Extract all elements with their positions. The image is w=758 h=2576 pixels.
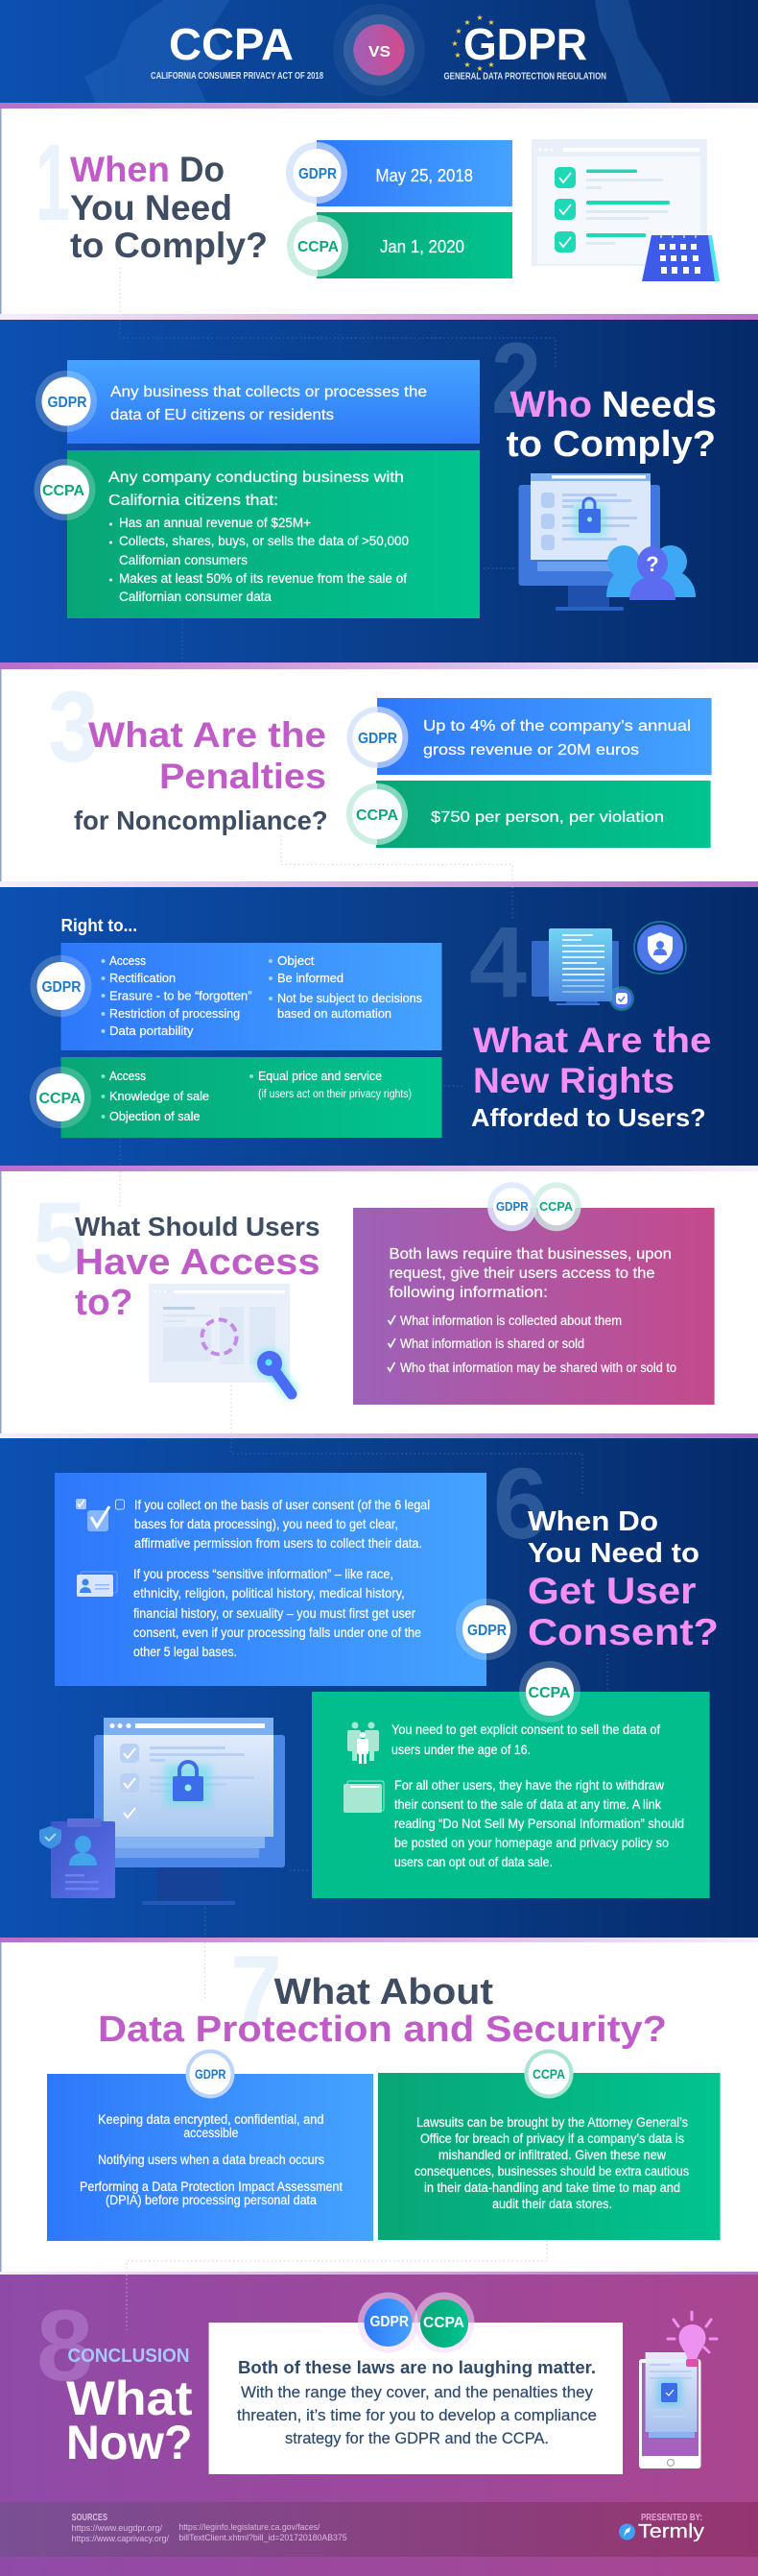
GDPR penalty: gross revenue or 20M euros — [423, 742, 639, 758]
illustration: secure monitor and profile card — [39, 1718, 285, 1905]
heading: what should users have access to — [75, 1212, 320, 1323]
GDPR consent panel — [55, 1473, 517, 1686]
CCPA security panel — [378, 2049, 721, 2240]
CCPA box: Has an annual revenue of $25M+ — [119, 515, 311, 530]
versus badge — [333, 4, 425, 96]
access panel — [353, 1182, 715, 1405]
CCPA box: Makes at least 50% of its revenue from the sale of — [119, 570, 407, 586]
GDPR rights: Access — [109, 953, 146, 968]
GDPR box: Any business that collects or processes the — [110, 384, 427, 400]
conclusion card: strategy for the GDPR and the CCPA. — [285, 2429, 549, 2447]
CCPA penalty: $750 per person, per violation — [431, 809, 664, 826]
access panel: What information is collected about them — [400, 1313, 622, 1328]
CCPA box: California citizens that: — [108, 493, 278, 509]
illustration: checklist and calendar — [532, 139, 720, 281]
GDPR security panel — [47, 2049, 373, 2241]
CCPA rights: (if users act on their privacy rights) — [258, 1089, 412, 1100]
CCPA date: Jan 1, 2020 — [380, 237, 464, 256]
footer band — [0, 2502, 758, 2557]
access panel: CCPA — [539, 1199, 574, 1214]
GDPR box: data of EU citizens or residents — [110, 407, 334, 423]
GDPR consent panel: If you process “sensitive information” – like race, — [133, 1566, 393, 1581]
sources: https://www.caprivacy.org/ — [72, 2534, 169, 2544]
CCPA box — [35, 450, 480, 618]
access panel: GDPR — [496, 1199, 529, 1214]
GDPR title — [443, 19, 606, 83]
number 4: 4 — [469, 906, 527, 1019]
GDPR penalty — [347, 698, 712, 775]
CCPA consent panel: users under the age of 16. — [391, 1742, 531, 1757]
number 5: 5 — [33, 1182, 86, 1294]
CCPA security panel: audit their data stores. — [492, 2197, 612, 2211]
section 5: user access — [33, 1182, 715, 1405]
GDPR security panel: GDPR — [195, 2066, 226, 2082]
section 3: penalties — [48, 671, 712, 848]
sources: https://www.eugdpr.org/ — [72, 2523, 162, 2534]
CCPA box: Californian consumers — [119, 552, 248, 567]
GDPR rights: Not be subject to decisions — [277, 991, 422, 1005]
CCPA security panel: CCPA — [533, 2066, 565, 2082]
heading: who needs to comply — [507, 385, 717, 465]
GDPR security panel: (DPIA) before processing personal data — [106, 2193, 317, 2207]
EU stars — [451, 13, 495, 73]
CCPA consent panel: be posted on your homepage and privacy policy so — [394, 1835, 669, 1850]
GDPR consent panel: other 5 legal bases. — [133, 1644, 237, 1659]
CCPA rights: Equal price and service — [258, 1069, 382, 1083]
CCPA consent panel: For all other users, they have the right to withdraw — [394, 1777, 665, 1793]
heading: when do you need to comply: to Comply? — [70, 226, 268, 265]
heading: what about data protection and security: Data Protection and Security? — [98, 2010, 667, 2050]
CCPA box: Any company conducting business with — [108, 469, 404, 486]
sources: https://leginfo.legislature.ca.gov/faces/ — [178, 2522, 320, 2533]
CCPA security panel: in their data-handling and take time to map and — [424, 2180, 680, 2195]
GDPR rights: Data portability — [109, 1023, 194, 1038]
GDPR consent panel: GDPR — [467, 1623, 507, 1639]
presented by Termly logo: PRESENTED BY: — [641, 2513, 702, 2523]
CCPA security panel: Office for breach of privacy if a company’s data is — [420, 2131, 684, 2146]
heading: when do you need to comply: When — [70, 150, 170, 189]
EU stars: ★ — [463, 18, 471, 27]
heading: what are the penalties: Penalties — [159, 757, 326, 796]
GDPR consent panel: If you collect on the basis of user consent (of the 6 legal — [134, 1497, 430, 1512]
GDPR rights: Restriction of processing — [109, 1006, 240, 1021]
section 8: conclusion — [0, 2290, 758, 2557]
CCPA box: Collects, shares, buys, or sells the data of >50,000 — [119, 533, 409, 548]
access panel: What information is shared or sold — [400, 1336, 584, 1351]
heading: conclusion what now: Now? — [66, 2416, 192, 2469]
presented by Termly logo: Termly — [638, 2521, 704, 2542]
conclusion card: CCPA — [423, 2315, 464, 2331]
GDPR penalty: GDPR — [358, 731, 397, 747]
access panel: Who that information may be shared with or sold to — [400, 1360, 676, 1375]
GDPR consent panel: affirmative permission from users to collect their data. — [134, 1535, 422, 1551]
conclusion card: threaten, it’s time for you to develop a compliance — [237, 2406, 597, 2424]
CCPA consent panel: reading “Do Not Sell My Personal Information” should — [394, 1816, 684, 1831]
CCPA rights: Objection of sale — [109, 1109, 200, 1123]
heading: what are the new rights: Afforded to Users? — [471, 1103, 706, 1132]
EU stars: ★ — [487, 60, 495, 69]
GDPR rights: GDPR — [42, 979, 82, 996]
sources: billTextClient.xhtml?bill_id=201720180AB375 — [178, 2533, 347, 2543]
illustration: phone and light bulb — [639, 2312, 717, 2468]
GDPR title: GDPR — [463, 19, 587, 69]
GDPR security panel: Performing a Data Protection Impact Assessment — [80, 2179, 343, 2194]
GDPR consent panel: ethnicity, religion, political history, medical history, — [133, 1585, 405, 1601]
GDPR consent panel: financial history, or sexuality – you must first get user — [133, 1605, 415, 1621]
heading: when do you need to comply: You Need — [70, 188, 232, 228]
EU stars: ★ — [451, 39, 459, 48]
heading: what are the penalties: for Noncompliance? — [74, 806, 328, 835]
illustration: monitor with lock and users: ? — [646, 552, 659, 576]
EU stars: ★ — [476, 13, 484, 22]
heading: conclusion what now: CONCLUSION — [67, 2346, 190, 2367]
heading: when do you need to get user consent: Consent? — [528, 1612, 719, 1653]
conclusion card: Both of these laws are no laughing matter. — [238, 2358, 596, 2377]
heading: what are the new rights: What Are the — [473, 1021, 712, 1060]
EU stars: ★ — [476, 64, 484, 73]
GDPR rights: Rectification — [109, 971, 176, 985]
heading: what should users have access to: Have Access — [75, 1242, 320, 1283]
heading: conclusion what now — [66, 2346, 193, 2469]
EU stars: ★ — [455, 27, 462, 36]
heading: who needs to comply: to Comply? — [507, 424, 716, 465]
number 8: 8 — [36, 2290, 93, 2402]
GDPR rights: Object — [277, 953, 315, 968]
label: right to: Right to... — [61, 916, 137, 935]
number 7: 7 — [230, 1936, 282, 2048]
heading: what are the new rights: New Rights — [473, 1061, 675, 1100]
section 6: user consent — [39, 1448, 719, 1905]
conclusion card: With the range they cover, and the penalties they — [241, 2383, 593, 2401]
GDPR box: GDPR — [48, 395, 87, 411]
CCPA consent panel: users can opt out of data sale. — [394, 1854, 553, 1869]
CCPA rights: CCPA — [38, 1091, 82, 1107]
heading: who needs to comply: Who — [510, 385, 592, 425]
CCPA penalty — [346, 781, 711, 848]
GDPR security panel: accessible — [183, 2126, 238, 2140]
versus badge: VS — [368, 44, 391, 60]
GDPR consent panel: bases for data processing), you need to get clear, — [134, 1516, 398, 1531]
heading: when do you need to get user consent — [528, 1506, 719, 1653]
CCPA security panel: Lawsuits can be brought by the Attorney General’s — [416, 2115, 688, 2130]
heading: what should users have access to: to? — [75, 1283, 132, 1323]
heading: when do you need to get user consent: Get User — [528, 1571, 697, 1612]
GDPR security panel: Notifying users when a data breach occurs — [98, 2153, 324, 2167]
heading: what should users have access to: What Should Users — [75, 1212, 320, 1241]
heading: what are the penalties — [74, 715, 328, 835]
GDPR security panel: Keeping data encrypted, confidential, and — [98, 2112, 324, 2127]
illustration: monitor with lock and users — [518, 473, 696, 611]
heading: what are the penalties: What Are the — [88, 715, 326, 755]
number 6: 6 — [493, 1448, 548, 1560]
CCPA rights: Access — [109, 1069, 146, 1083]
EU stars: ★ — [454, 51, 462, 60]
CCPA title: CCPA — [169, 19, 294, 69]
GDPR date: May 25, 2018 — [376, 166, 473, 185]
illustration: browser and key — [149, 1284, 293, 1395]
GDPR penalty: Up to 4% of the company’s annual — [423, 718, 691, 734]
heading: what are the new rights — [471, 1021, 712, 1132]
CCPA title: CALIFORNIA CONSUMER PRIVACY ACT OF 2018 — [151, 71, 323, 82]
CCPA rights — [30, 1057, 441, 1138]
access panel: request, give their users access to the — [390, 1265, 654, 1282]
section 2: who needs to comply — [35, 323, 717, 618]
CCPA date: CCPA — [297, 239, 339, 255]
GDPR consent panel: consent, even if your processing falls under one of the — [133, 1625, 421, 1640]
section 4: new rights — [30, 906, 712, 1138]
sources — [72, 2513, 347, 2544]
EU stars: ★ — [463, 60, 471, 69]
section 7: data protection and security — [47, 1936, 721, 2241]
access panel: following information: — [390, 1285, 548, 1301]
heading: when do you need to get user consent: You Need to — [528, 1538, 699, 1569]
heading: when do you need to comply: Do — [179, 150, 225, 189]
CCPA consent panel: CCPA — [528, 1685, 571, 1701]
CCPA consent panel: their consent to the sale of data at any time. A link — [394, 1796, 662, 1812]
CCPA security panel: consequences, businesses should be extra cautious — [415, 2164, 689, 2179]
heading: who needs to comply: Needs — [602, 385, 717, 425]
heading: what about data protection and security: What About — [274, 1972, 493, 2012]
GDPR rights: Erasure - to be “forgotten” — [109, 989, 251, 1003]
CCPA box: Californian consumer data — [119, 589, 272, 604]
GDPR title: GENERAL DATA PROTECTION REGULATION — [443, 71, 606, 83]
GDPR rights — [31, 943, 441, 1050]
presented by Termly logo — [619, 2513, 704, 2542]
heading: conclusion what now: What — [66, 2371, 193, 2425]
CCPA consent panel: You need to get explicit consent to sell the data of — [391, 1721, 660, 1737]
EU stars: ★ — [487, 18, 495, 27]
heading: when do you need to get user consent: When Do — [528, 1506, 658, 1537]
section 1: when to comply — [36, 122, 720, 281]
sources: SOURCES — [72, 2513, 107, 2523]
GDPR rights: Be informed — [277, 971, 343, 985]
access panel: Both laws require that businesses, upon — [390, 1246, 672, 1263]
CCPA date — [287, 212, 512, 278]
CCPA rights: Knowledge of sale — [109, 1089, 209, 1103]
CCPA security panel: mishandled or infiltrated. Given these new — [438, 2148, 666, 2162]
CCPA box: CCPA — [42, 483, 84, 499]
GDPR date: GDPR — [298, 166, 337, 182]
CCPA penalty: CCPA — [356, 807, 398, 824]
number 2: 2 — [491, 323, 541, 435]
conclusion card — [209, 2293, 623, 2474]
heading: when do you need to comply — [70, 150, 268, 265]
CCPA consent panel — [312, 1661, 710, 1898]
number 1: 1 — [36, 122, 70, 243]
conclusion card: GDPR — [370, 2314, 409, 2330]
heading: what about data protection and security — [98, 1972, 667, 2050]
header band — [0, 0, 758, 103]
illustration: document and shield — [532, 922, 686, 1011]
GDPR date — [286, 140, 512, 206]
CCPA title — [151, 19, 323, 82]
GDPR box — [36, 360, 480, 444]
number 3: 3 — [48, 671, 99, 783]
GDPR rights: based on automation — [277, 1006, 391, 1021]
